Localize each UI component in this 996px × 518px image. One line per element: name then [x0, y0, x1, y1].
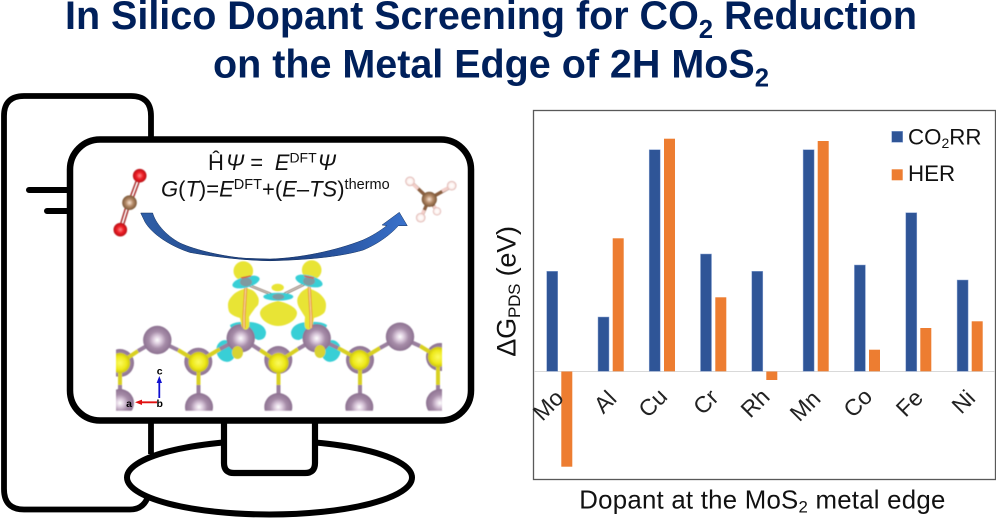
legend CO2RR: 2 — [941, 135, 949, 151]
charge density lobes behind slab — [213, 322, 344, 365]
top Mo atoms — [115, 322, 443, 412]
legend HER: HER — [908, 161, 955, 186]
category labels: Mo — [528, 385, 568, 425]
x axis title: metal edge — [808, 486, 945, 514]
zero line — [534, 370, 995, 372]
CO2RR bars — [547, 150, 968, 371]
cyan rings around adsorbate atoms — [231, 272, 324, 301]
category labels: Rh — [735, 383, 775, 423]
legend CO2RR: CO — [908, 124, 941, 149]
back Mo atoms — [106, 343, 454, 377]
equations — [161, 150, 390, 202]
Schrodinger equation: ĤΨ = E — [208, 150, 289, 175]
legend — [892, 124, 981, 186]
tower drive slots — [29, 190, 72, 211]
Gibbs free energy equation: DFT — [234, 177, 262, 193]
x axis title: 2 — [799, 497, 808, 516]
Gibbs free energy equation: G(T)=E — [161, 177, 234, 202]
monitor base — [127, 440, 412, 514]
computer illustration — [4, 96, 471, 514]
Gibbs free energy equation: E–TS) — [282, 177, 345, 202]
Gibbs free energy equation: +( — [262, 177, 283, 202]
axis labels: b — [156, 398, 163, 410]
category labels: Cr — [688, 384, 724, 419]
y axis title: PDS — [505, 284, 524, 318]
MoS2 atoms and bonds — [115, 321, 443, 412]
reaction arrow — [141, 212, 407, 261]
category labels: Al — [589, 385, 621, 418]
category labels: Cu — [633, 383, 672, 422]
y axis title: (eV) — [492, 226, 522, 284]
legend CO2RR — [892, 124, 981, 151]
axis labels: a — [126, 398, 132, 410]
MoS2 slab with charge density — [115, 259, 443, 412]
Schrodinger equation: Ψ — [318, 150, 337, 175]
CO2 molecule — [114, 169, 146, 236]
y axis title: ΔG — [492, 318, 522, 357]
computer tower — [4, 96, 151, 510]
a axis arrow — [140, 401, 157, 403]
bar chart — [492, 110, 996, 516]
CH4 molecule — [405, 176, 457, 222]
adsorbate bonds — [244, 282, 311, 328]
monitor screen — [70, 140, 471, 420]
Gibbs free energy equation: thermo — [345, 177, 390, 193]
Schrodinger equation: DFT — [289, 150, 317, 166]
axis labels — [126, 366, 163, 410]
monitor stand — [224, 420, 315, 473]
chart frame — [534, 110, 996, 480]
category labels: Fe — [891, 384, 928, 422]
category labels: Mn — [785, 385, 825, 426]
yellow density lobes — [228, 260, 326, 330]
legend CO2RR: RR — [949, 124, 981, 149]
crystal axes — [126, 366, 163, 410]
c axis arrow — [158, 381, 160, 398]
axis labels: c — [157, 366, 163, 378]
title line 2: on the Metal Edge of 2H MoS — [213, 42, 755, 86]
category labels: Co — [838, 383, 877, 422]
small yellow lobes under Mo — [232, 345, 326, 359]
title line 1: 2 — [699, 16, 713, 44]
x axis title: Dopant at the MoS — [579, 486, 798, 514]
category labels: Ni — [946, 385, 980, 419]
S atoms — [110, 347, 448, 373]
title — [65, 0, 917, 92]
category labels — [528, 383, 980, 426]
title line 2: 2 — [755, 64, 769, 92]
Mo-S bonds — [117, 340, 441, 394]
HER bars — [561, 139, 983, 467]
